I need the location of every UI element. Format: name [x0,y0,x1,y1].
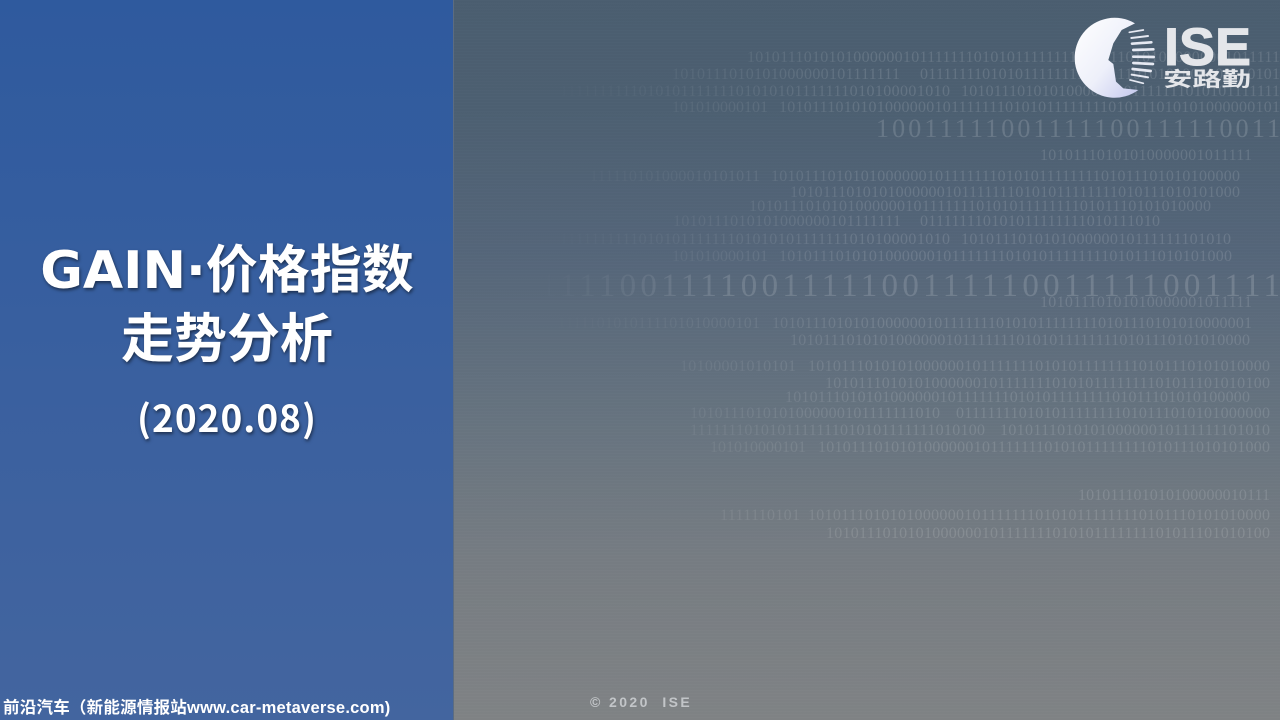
binary code texture: 1111110101 [720,507,800,524]
binary code texture: 1010111010101000000101111111 [672,66,900,83]
binary code texture: 111111111101010111111101010101111111010100001010 [560,83,950,100]
panel: grey-blue background [454,0,1280,720]
date subtitle: (2020.08) [137,389,317,443]
icon: crescent head [1075,18,1154,98]
binary code texture: 101011101010100000010111111101010 [961,231,1231,248]
binary code texture: 10100001010101 [680,358,796,375]
binary code texture: 1010111010101000000101111111010 [690,405,940,422]
binary code texture: 101011101010100000010111111101010111111110101110101010000001011111 [747,49,1280,66]
binary code texture: 1010111010101000000101111111010101111111101011101010100 [826,525,1270,542]
binary code texture: 111110101000010101011 [590,168,760,185]
title line 2: 走势分析 [121,297,333,373]
binary code texture: 101010000101 [672,248,768,265]
title line 1: GAIN·价格指数 [40,241,414,301]
binary code texture: 011111110101011111111010111010 [920,213,1160,230]
logo wordmark: ISE [1164,18,1251,77]
binary code texture: 101011101010100000010111111101010111111110101110101010000 [808,507,1270,524]
binary code texture: 101010000101 [710,439,806,456]
binary code texture: 10101110101010000001011111110101011111111010111010101000 [790,184,1240,201]
binary code texture: 1010111010101000000101111111010101111111101011101010100000 [771,168,1240,185]
binary code texture: 101011101010100000010111111101010111111110101110101010000 [749,198,1211,215]
binary code texture: 10101110101010000001011111 [1040,147,1252,164]
binary code texture: 10101110101010000001011111 [1040,294,1252,311]
copyright: © 2020 ISE [590,694,692,710]
binary code texture: 10011111001111100111110011 [876,114,1280,143]
binary code texture: 1010111010101000000101111111010101111111101011101010100 [825,375,1270,392]
binary code texture: 10101110101010000001011111110101011111111010111010101000 [818,439,1270,456]
binary code texture: 011111110101011111111010111010101000000 [956,405,1270,422]
panel: blue title panel [0,0,454,720]
binary code texture: 101011101010100000010111111101010111111110101110101010000 [808,358,1270,375]
binary code texture: 101011101010100000010111111101010111111110101110101010000001 [772,315,1252,332]
binary code texture: 101011101010100000010111111101010 [1000,422,1270,439]
binary code texture: 101011101010100000010111111101010111111110101110101010000 [790,332,1250,349]
binary code texture: 1111111010101111111010101111111010100 [690,422,985,439]
binary code texture: 1010111010101000000101111111010101111111 [961,83,1280,100]
binary code texture: 1010111010101000000101111111010101111111101011101010100000 [785,389,1250,406]
source footer: 前沿汽车（新能源情报站www.car-metaverse.com) [3,699,390,717]
binary code texture: 1111001111001111100111110011111001111 [540,268,1280,304]
binary code texture: 101010000101 [672,99,768,116]
binary code texture: 11111101010111101010000101 [550,315,760,332]
binary code texture: 011111110101011111111010111010101000000110101 [920,66,1280,83]
logo Chinese name: 安路勤 [1163,63,1251,92]
binary code texture: 111111111101010111111101010101111111010100001010 [560,231,950,248]
binary code texture: 101011101010100000010111 [1078,487,1270,504]
binary code texture: 10101110101010000001011111110101011111111010111010101000 [779,248,1232,265]
binary code texture: 1010111010101000000101111111 [673,213,901,230]
binary code texture: 10101110101010000001011111110101011111111010111010101000000101 [779,99,1280,116]
